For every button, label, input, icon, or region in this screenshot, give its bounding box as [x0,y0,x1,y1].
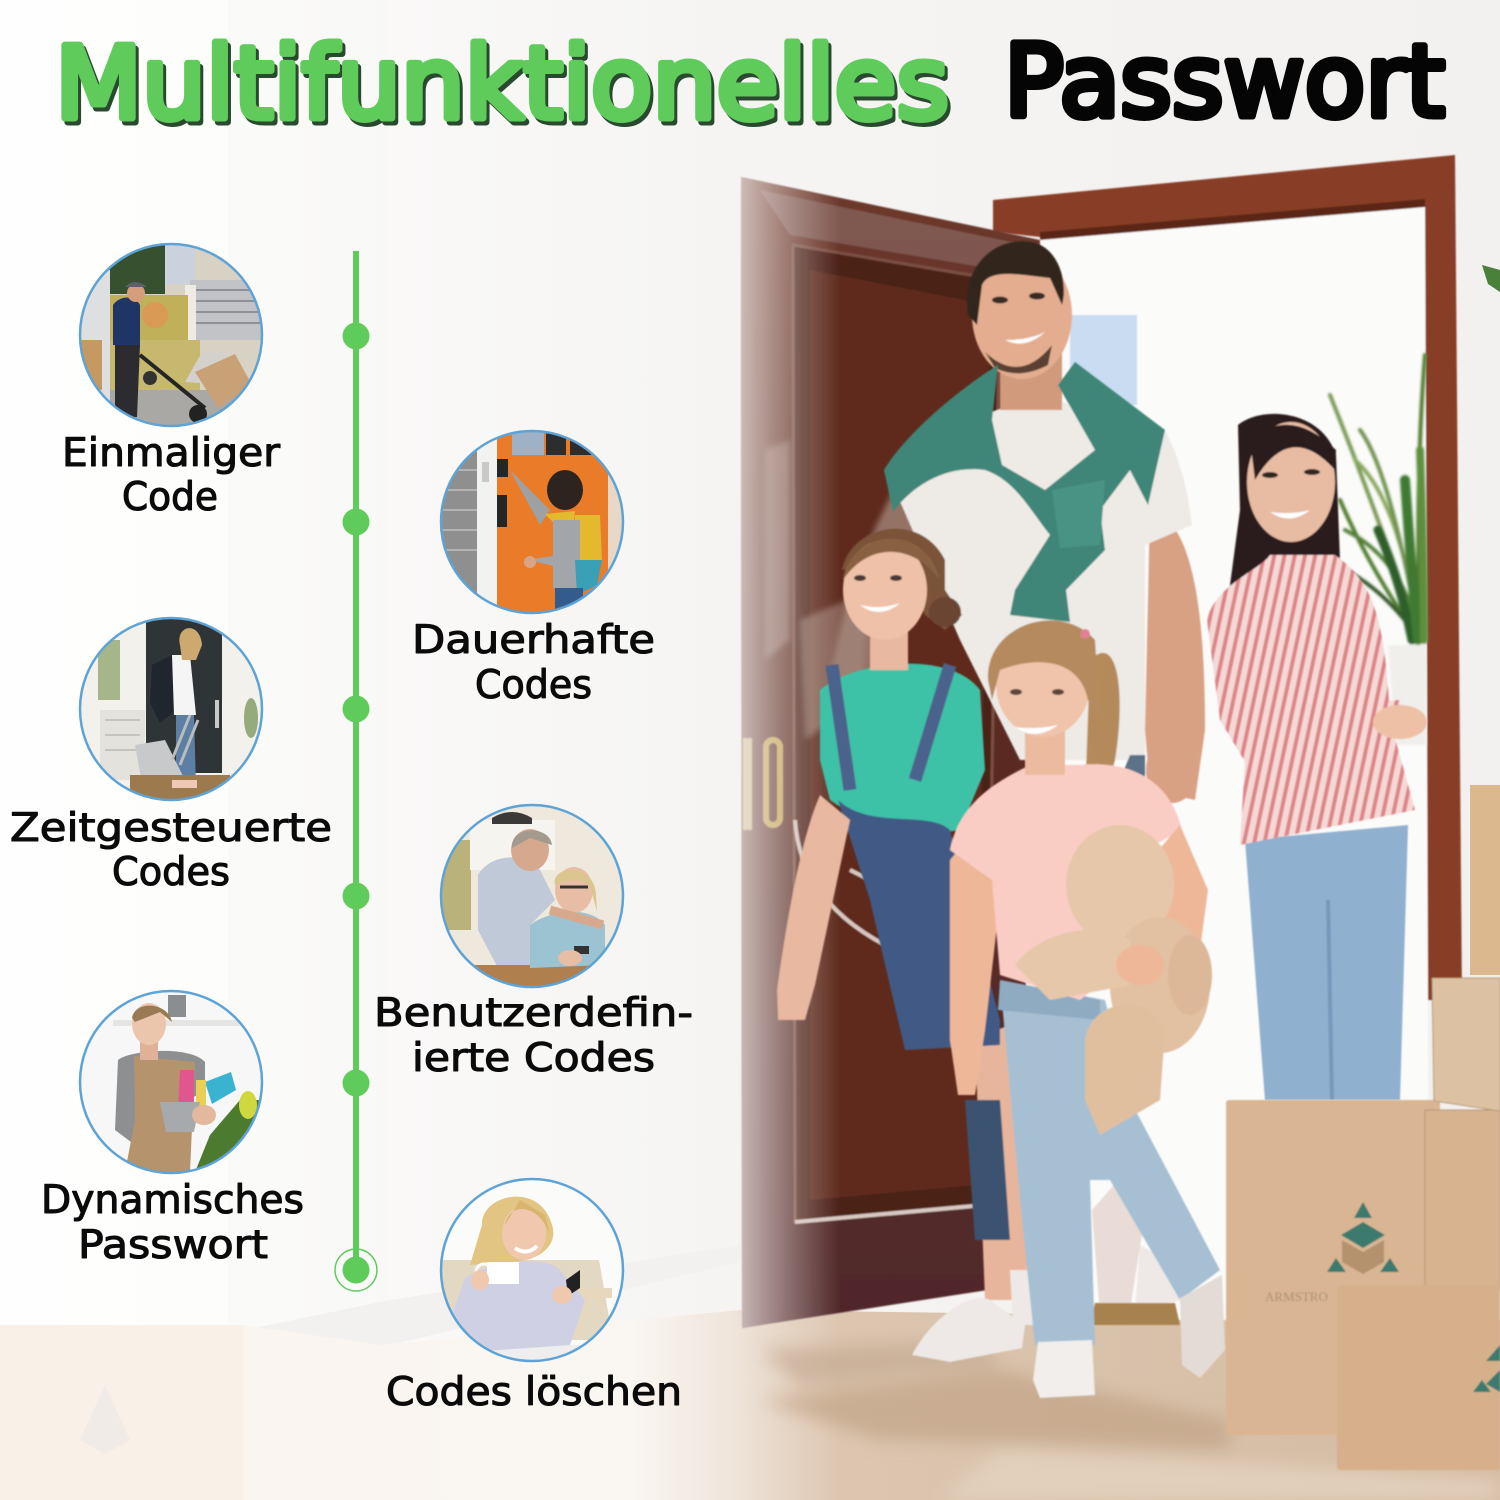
label: Benutzerdefinierte Codes: Benutzerdefin- [374,991,693,1036]
woman in striped shirt [1207,414,1427,1100]
door frame [993,155,1462,1320]
moving boxes [1226,978,1500,1470]
label: Zeitgesteuerte Codes: Codes [112,850,230,895]
label: Dynamisches Passwort: Passwort [78,1223,268,1268]
box logo right [1473,1345,1500,1392]
label: Benutzerdefinierte Codes: ierte Codes [412,1036,655,1081]
father [884,241,1205,803]
label: Dauerhafte Codes [412,618,655,708]
door handle [743,738,780,830]
box brand text: ARMSTRO [1265,1289,1328,1304]
label: Dynamisches Passwort: Dynamisches [41,1178,304,1223]
step 5: cleaner photo [80,991,262,1173]
family [777,241,1427,1398]
label: Codes löschen: Codes löschen [386,1370,682,1415]
label: Einmaliger Code: Code [122,475,218,520]
title green word: Multifunktionelles [55,25,949,142]
title black word: Passwort [1004,23,1445,140]
step 6: woman with phone photo [441,1179,623,1365]
label: Benutzerdefinierte Codes [374,991,693,1081]
title [55,23,1445,146]
label: Zeitgesteuerte Codes [10,806,332,895]
timeline [335,251,377,1291]
label: Dauerhafte Codes: Codes [475,663,592,708]
teddy bear [1015,825,1212,1135]
step 2: boy at orange door photo [441,431,623,613]
teal sweater [884,362,1165,622]
label: Einmaliger Code [62,431,281,520]
older girl [777,529,1035,1300]
step 3: woman at front door photo [80,618,262,805]
label: Dynamisches Passwort [41,1178,304,1268]
label: Dauerhafte Codes: Dauerhafte [412,618,655,663]
label: Einmaliger Code: Einmaliger [62,431,281,476]
title shadow: Multifunktionelles [58,29,952,146]
potted plant [1330,355,1426,745]
floor wood streaks [760,1340,1500,1500]
step 1: delivery photo [80,244,265,430]
open door [741,177,1040,1328]
wall edge items [1470,265,1500,975]
younger girl [950,620,1225,1398]
label: Zeitgesteuerte Codes: Zeitgesteuerte [10,806,332,851]
step 4: older couple photo [441,805,623,990]
box logo [1327,1202,1399,1274]
sneakers back [912,1178,1182,1362]
